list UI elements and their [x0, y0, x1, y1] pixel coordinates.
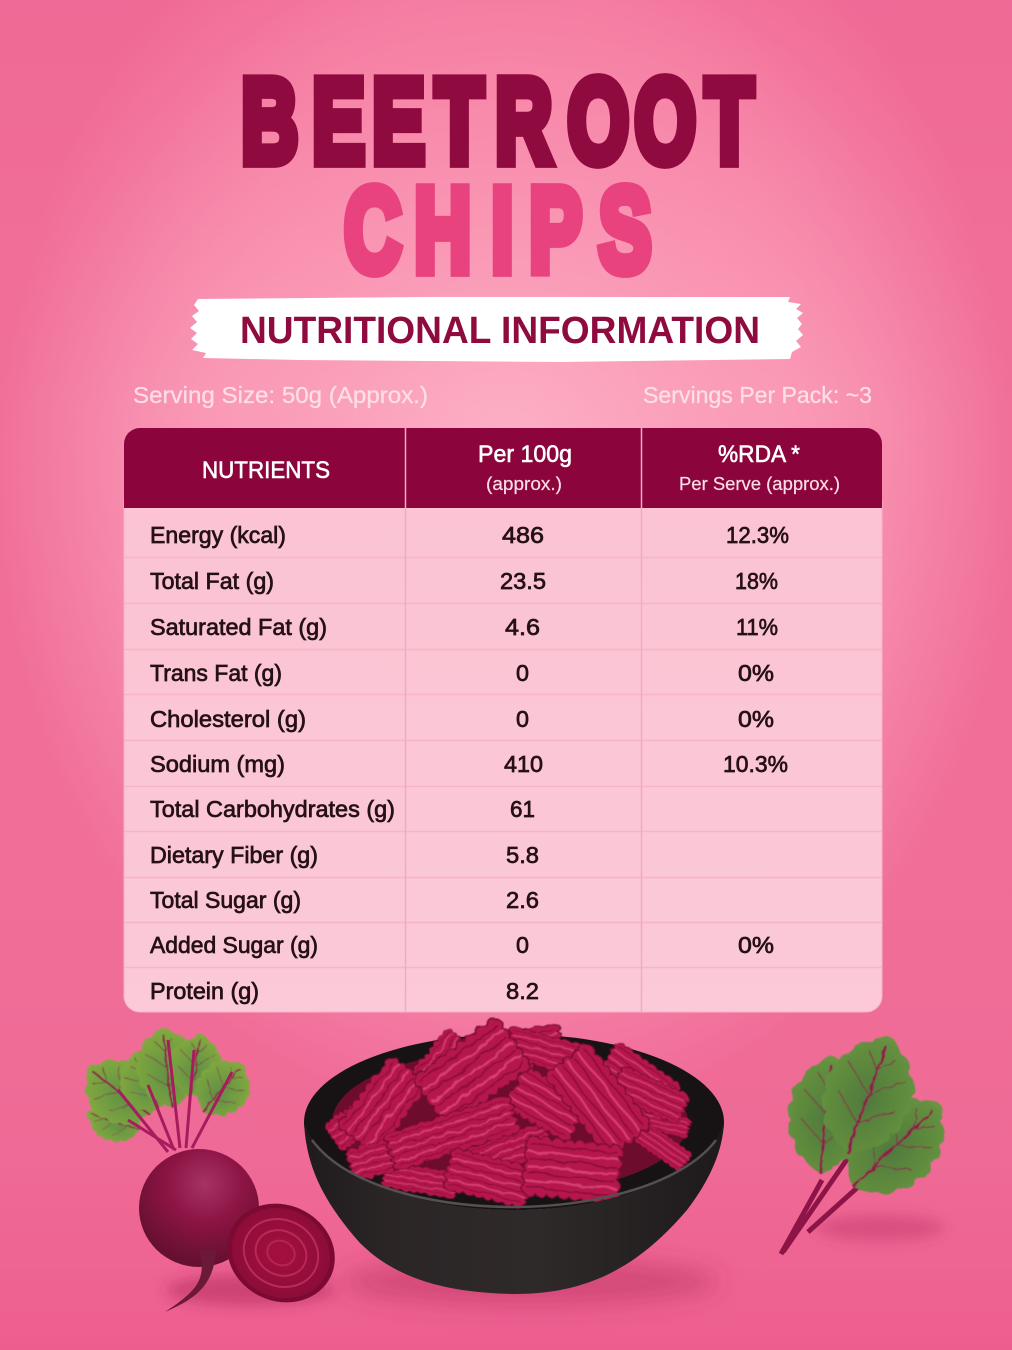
RDA values — [723, 522, 789, 958]
nutrition table — [124, 428, 882, 1012]
chips — [323, 1015, 694, 1209]
illustration: bowl of beetroot chips — [304, 1015, 724, 1306]
chips bed — [332, 1050, 688, 1194]
nutrient names: Energy (kcal) — [150, 522, 286, 548]
bowl front — [304, 1122, 724, 1294]
beet leaves — [69, 1024, 263, 1150]
per 100g values: 486 — [502, 522, 544, 548]
beet stems — [118, 1040, 232, 1152]
per 100g values: 5.8 — [506, 842, 539, 868]
title: Beetroot: BEETROOT — [241, 56, 753, 188]
beet slice — [211, 1186, 351, 1320]
per 100g values: 4.6 — [505, 614, 540, 640]
nutrient names: Protein (g) — [150, 978, 259, 1004]
bowl rim — [312, 1140, 716, 1207]
leaves — [782, 1021, 968, 1217]
leaf shadow — [815, 1215, 945, 1241]
nutrient names — [150, 522, 395, 1004]
table header: (approx.) — [486, 474, 562, 494]
RDA values: 0% — [738, 660, 774, 686]
per 100g values — [500, 522, 546, 1004]
servings per pack: Servings Per Pack: ~3 — [643, 382, 872, 408]
nutrient names: Dietary Fiber (g) — [150, 842, 318, 868]
banner: nutritional information: NUTRITIONAL INFORMATION — [240, 310, 760, 352]
nutrient names: Added Sugar (g) — [150, 932, 318, 958]
per 100g values: 0 — [516, 932, 529, 958]
table header: Per Serve (approx.) — [679, 474, 840, 494]
table header — [124, 428, 882, 508]
RDA values: 12.3% — [726, 522, 789, 548]
nutrient names: Saturated Fat (g) — [150, 614, 327, 640]
per 100g values: 410 — [504, 751, 543, 777]
nutrient names: Total Fat (g) — [150, 568, 274, 594]
nutrient names: Trans Fat (g) — [150, 660, 282, 686]
bowl back and inside — [304, 1034, 724, 1210]
RDA values: 11% — [736, 614, 778, 640]
RDA values: 0% — [738, 706, 774, 732]
RDA values: 0% — [738, 932, 774, 958]
table header: Per 100g — [478, 441, 572, 468]
RDA values: 18% — [735, 568, 778, 594]
banner: nutritional information — [190, 297, 803, 362]
stems — [781, 1155, 858, 1254]
per 100g values: 2.6 — [506, 887, 539, 913]
bowl shadow — [340, 1258, 720, 1306]
table header: NUTRIENTS — [202, 457, 330, 484]
beet bulb — [139, 1149, 259, 1267]
illustration: beetroot with leaves — [69, 1024, 351, 1320]
title: Chips: CHIPS — [344, 165, 651, 297]
nutrient names: Total Carbohydrates (g) — [150, 796, 395, 822]
beet tail — [165, 1250, 216, 1312]
RDA values: 10.3% — [723, 751, 788, 777]
nutrient names: Total Sugar (g) — [150, 887, 301, 913]
beet shadow — [165, 1274, 335, 1306]
illustration: beet leaf bunch — [781, 1021, 968, 1254]
nutrient names: Sodium (mg) — [150, 751, 285, 777]
per 100g values: 8.2 — [506, 978, 539, 1004]
nutrient names: Cholesterol (g) — [150, 706, 306, 732]
per 100g values: 23.5 — [500, 568, 546, 594]
table header: %RDA * — [718, 441, 800, 468]
per 100g values: 0 — [516, 706, 529, 732]
serving size: Serving Size: 50g (Approx.) — [133, 382, 428, 408]
per 100g values: 0 — [516, 660, 529, 686]
per 100g values: 61 — [510, 796, 535, 822]
table body — [124, 500, 882, 1012]
